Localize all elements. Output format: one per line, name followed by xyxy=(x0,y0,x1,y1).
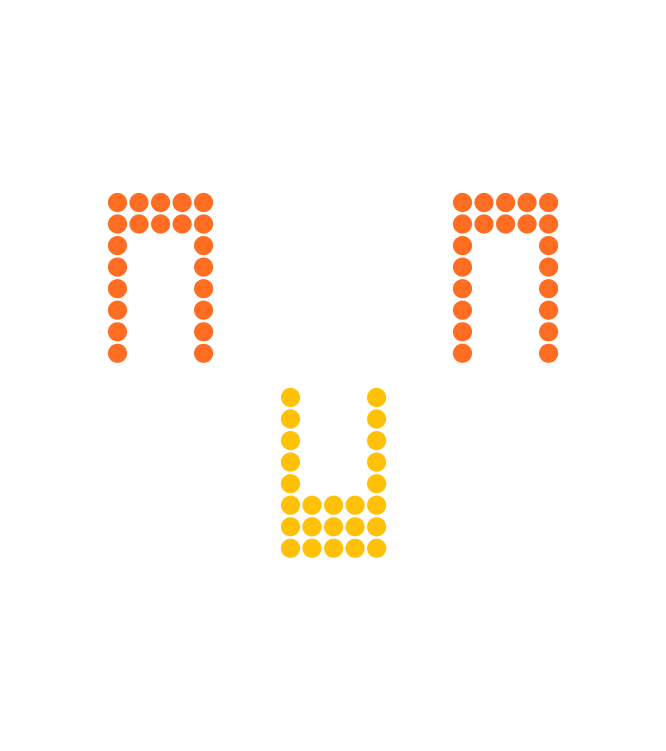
left orange dot shape xyxy=(108,193,213,363)
center yellow dot shape xyxy=(281,388,386,558)
right orange dot shape xyxy=(453,193,558,363)
